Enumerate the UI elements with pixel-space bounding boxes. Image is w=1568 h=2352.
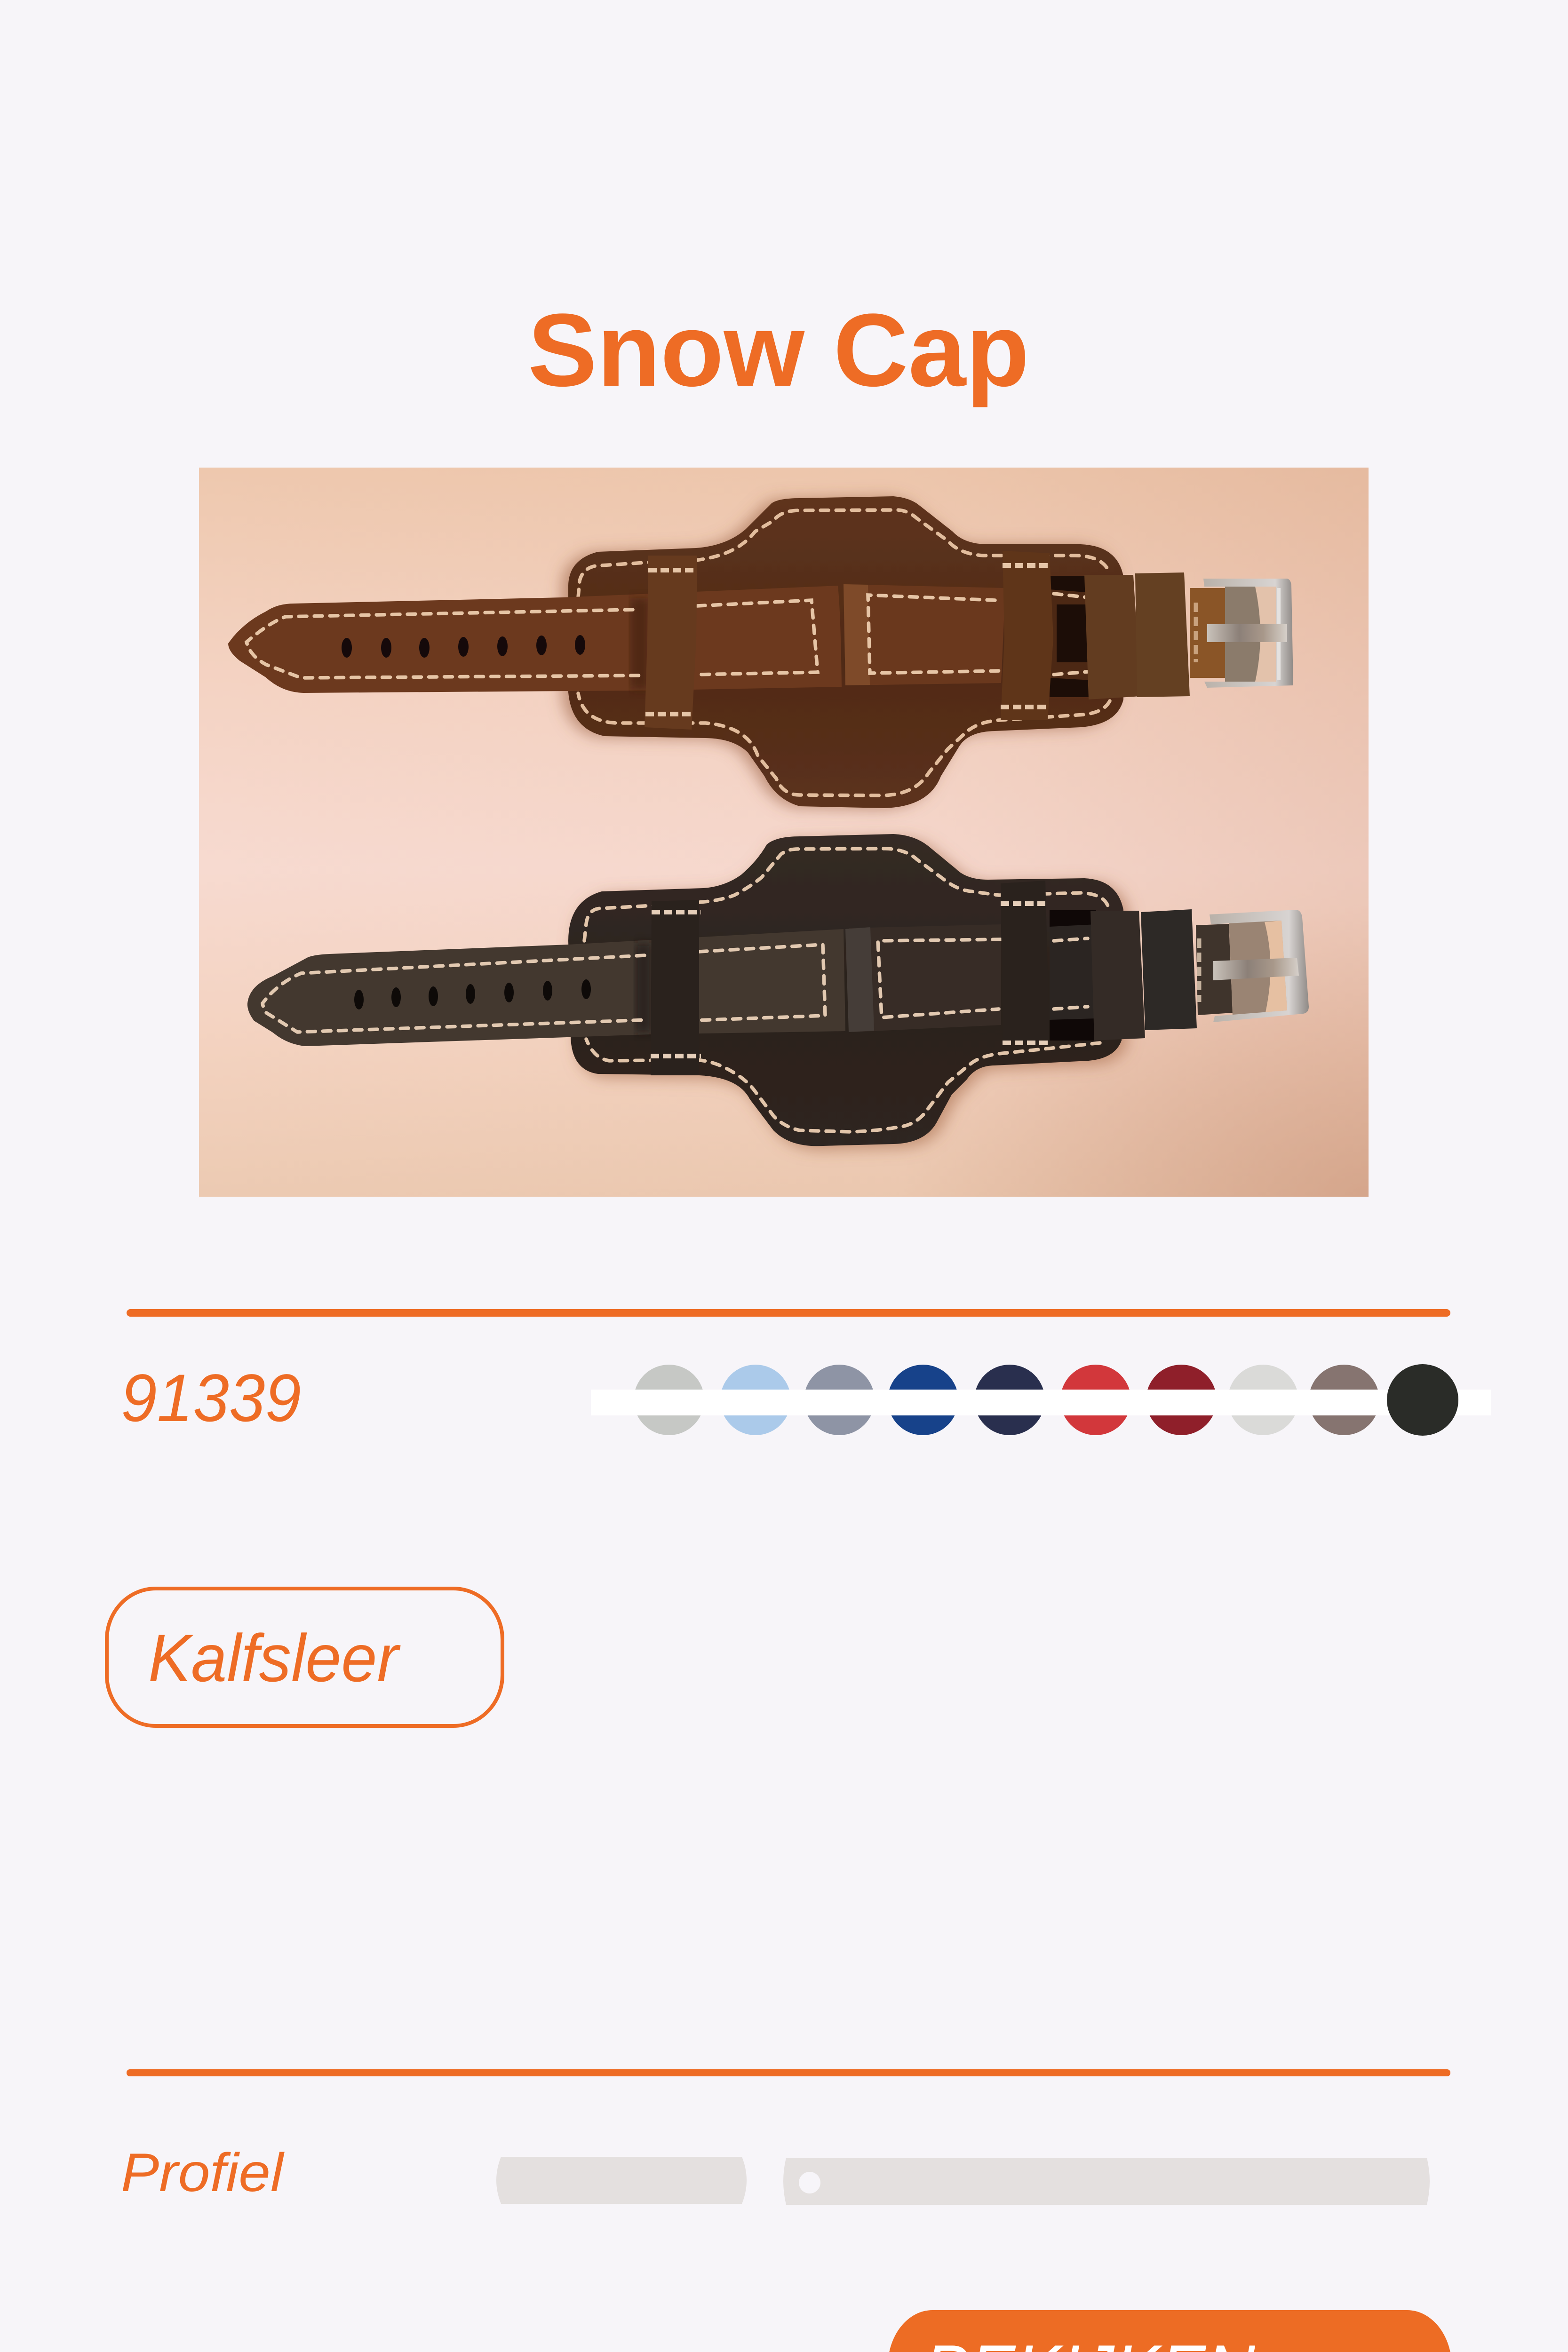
view button xyxy=(888,2310,1452,2352)
profile placeholder right xyxy=(783,2158,1430,2205)
top divider xyxy=(127,1309,1450,1317)
brown bund strap xyxy=(228,496,1293,808)
article number: 91339 xyxy=(121,1361,301,1436)
profile placeholder left xyxy=(496,2157,747,2204)
colour swatches xyxy=(591,1364,1491,1436)
material tag: Kalfsleer xyxy=(148,1621,401,1696)
product photo: two leather bund watch straps xyxy=(199,468,1369,1197)
profile label: Profiel xyxy=(121,2143,285,2203)
title: Snow Cap xyxy=(528,292,1029,408)
dark brown bund strap xyxy=(247,834,1309,1146)
bottom divider xyxy=(127,2069,1450,2076)
material tag xyxy=(107,1589,502,1726)
